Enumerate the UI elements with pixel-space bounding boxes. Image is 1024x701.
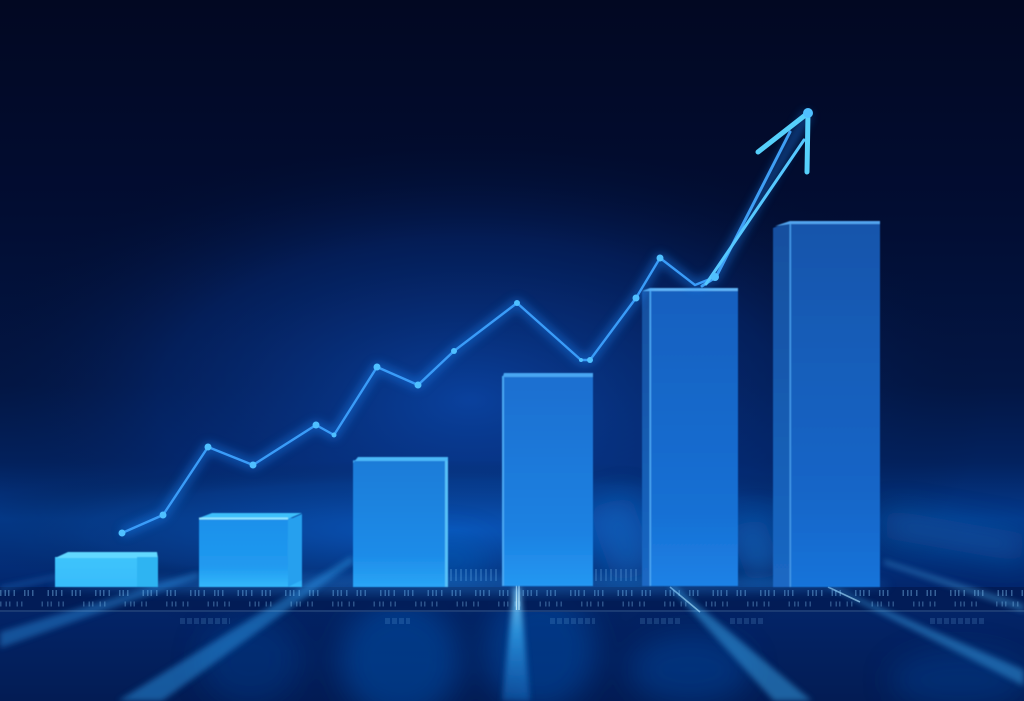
bar chart: six rising bars	[55, 221, 880, 587]
bar 6	[773, 221, 880, 587]
bar 2	[199, 513, 302, 587]
arrow: growth arrow	[702, 113, 808, 286]
floor beams	[0, 556, 1024, 701]
line chart: rising trend line	[122, 258, 715, 533]
line chart: glow	[122, 113, 808, 533]
bar 1	[55, 552, 158, 587]
bar 4	[502, 373, 593, 586]
data points	[118, 108, 813, 536]
floor: perspective grid	[0, 494, 1024, 701]
floor reflections	[200, 494, 1024, 701]
glow beneath bars	[50, 575, 890, 595]
bar 3	[353, 457, 448, 587]
dark data band	[0, 587, 1024, 612]
bar 5	[642, 288, 738, 586]
floor data band	[0, 575, 1024, 621]
